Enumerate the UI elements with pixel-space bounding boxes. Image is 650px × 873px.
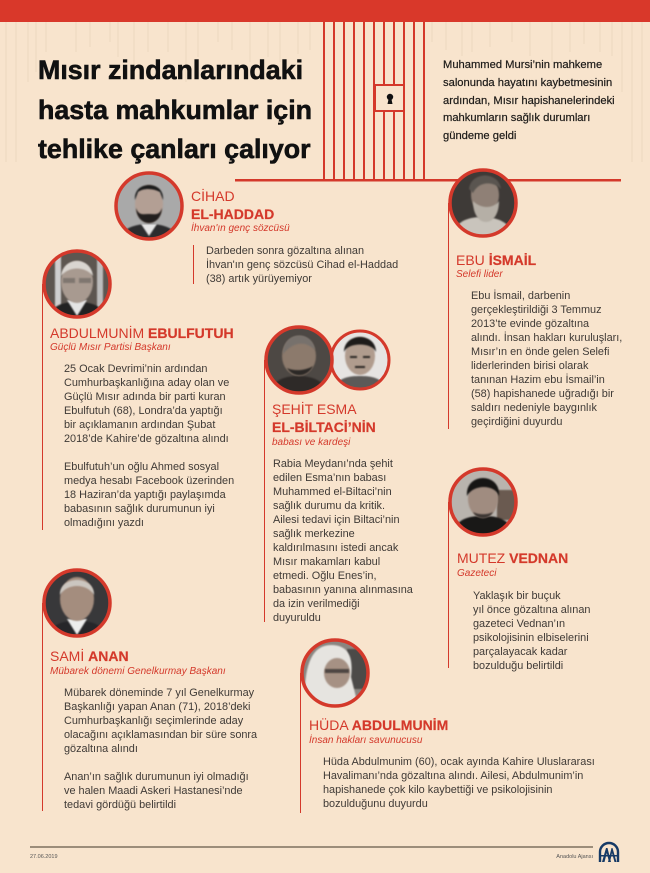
description: bozulduğu belirtildi <box>473 660 563 672</box>
description: gözaltına alındı <box>64 743 138 755</box>
title: tehlike çanları çalıyor <box>38 134 311 164</box>
panel: Ebu İsmail <box>448 168 622 429</box>
role: İhvan'ın genç sözcüsü <box>191 223 290 234</box>
source: Anadolu Ajansı <box>556 854 593 860</box>
description: Yaklaşık bir buçuk <box>473 590 561 602</box>
role: Güçlü Mısır Partisi Başkanı <box>50 342 171 353</box>
name <box>272 401 376 435</box>
description <box>64 687 258 811</box>
description <box>206 245 398 285</box>
panel: Cihad el-Haddad <box>114 171 398 285</box>
description: Muhammed el-Biltaci’nin <box>273 486 392 498</box>
date: 27.06.2019 <box>30 854 58 860</box>
role: Selefi lider <box>456 269 503 280</box>
description: Başkanlığı yapan Anan (71), 2018’deki <box>64 701 250 713</box>
description: parçalayacak kadar <box>473 646 567 658</box>
accent line <box>448 203 449 429</box>
footer rule <box>30 846 593 848</box>
accent line <box>193 245 194 284</box>
description <box>323 756 595 810</box>
description: Cumhurbaşkanlığına aday olan ve <box>64 377 229 389</box>
description: edilen Esma’nın babası <box>273 472 386 484</box>
description: Mısır makamları kabul <box>273 556 380 568</box>
description: medya hesabı Facebook üzerinden <box>64 475 234 487</box>
description: Güçlü Mısır adında bir parti kuran <box>64 391 226 403</box>
description: ve halen Maadi Askeri Hastanesi’nde <box>64 785 243 797</box>
description: geçirdiğini duyurdu <box>471 416 562 428</box>
description: sağlık durumu da kritik. <box>273 500 385 512</box>
description: etmedi. Oğlu Enes’in, <box>273 570 377 582</box>
panel: Abdulmunim Ebulfutuh <box>42 249 234 530</box>
description: Havalimanı’nda gözaltına alındı. Ailesi, Abdulmunim’in <box>323 770 583 782</box>
panel: Şehit Esma el-Biltaci'nin babası ve kardeşi <box>264 325 413 624</box>
name: CİHAD <box>191 188 235 204</box>
intro text: mahkumların sağlık durumları <box>443 112 590 124</box>
description: duyuruldu <box>273 612 321 624</box>
description: sağlık merkezine <box>273 528 355 540</box>
description <box>473 590 590 672</box>
intro text: ardından, Mısır hapishanelerindeki <box>443 95 615 107</box>
description: 18 Haziran’da yaptığı paylaşımda <box>64 489 226 501</box>
photo: Sami Anan <box>42 568 112 638</box>
accent line <box>42 284 43 530</box>
intro text: Muhammed Mursi’nin mahkeme <box>443 59 602 71</box>
description: 2013’te evinde gözaltına <box>471 318 589 330</box>
name: HÜDA ABDULMUNİM <box>309 717 448 733</box>
description: psikolojisinin elbiselerini <box>473 632 589 644</box>
role: Gazeteci <box>457 568 496 579</box>
description: Ebu İsmail, darbenin <box>471 290 570 302</box>
description: kaldırılmasını istedi ancak <box>273 542 398 554</box>
description: 2018’de Kahire’de gözaltına alındı <box>64 433 229 445</box>
photo: Ebu İsmail <box>448 168 518 238</box>
photo: brother <box>332 330 390 390</box>
photo: Mutez Vednan <box>448 467 518 537</box>
description: Ebulfutuh (68), Londra’da yaptığı <box>64 405 223 417</box>
accent line <box>300 673 301 813</box>
description: Rabia Meydanı’nda şehit <box>273 458 393 470</box>
intro text <box>443 59 615 142</box>
intro text: salonunda hayatını kaybetmesinin <box>443 77 612 89</box>
name: ŞEHİT ESMA <box>272 401 357 417</box>
description: babasının yanına alınmasına <box>273 584 413 596</box>
description: Hüda Abdulmunim (60), ocak ayında Kahire Uluslararası <box>323 756 595 768</box>
description: İhvan'ın genç sözcüsü Cihad el-Haddad <box>206 259 398 271</box>
role: babası ve kardeşi <box>272 437 350 448</box>
role: Mübarek dönemi Genelkurmay Başkanı <box>50 666 226 677</box>
description: hapishanede çok kilo kaybettiği ve psikolojisinin <box>323 784 552 796</box>
intro text: gündeme geldi <box>443 130 516 142</box>
description: gerçekleştirildiği 3 Temmuz <box>471 304 602 316</box>
name <box>191 188 274 222</box>
description: babasının sağlık durumunun iyi <box>64 503 215 515</box>
description: alındı. İnsan hakları kuruluşları, <box>471 332 622 344</box>
description: bozulduğunu duyurdu <box>323 798 428 810</box>
description: olmadığını yazdı <box>64 517 144 529</box>
panel: Sami Anan <box>42 568 258 811</box>
panel: Mutez Vednan <box>448 467 590 672</box>
accent line <box>264 360 265 622</box>
description: saldırı nedeniyle baygınlık <box>471 402 597 414</box>
title <box>38 55 312 164</box>
description: bir açıklamanın ardından Şubat <box>64 419 215 431</box>
description: (38) artık yürüyemiyor <box>206 273 312 285</box>
accent line <box>42 603 43 811</box>
description: gazeteci Vednan’ın <box>473 618 565 630</box>
accent line <box>448 502 449 668</box>
name: ABDULMUNİM EBULFUTUH <box>50 325 234 341</box>
description: Ailesi tedavi için Biltaci’nin <box>273 514 400 526</box>
description <box>64 363 234 529</box>
name: EBU İSMAİL <box>456 252 536 268</box>
name: SAMİ ANAN <box>50 648 129 664</box>
title: hasta mahkumlar için <box>38 94 312 124</box>
name: MUTEZ VEDNAN <box>457 550 568 566</box>
title: Mısır zindanlarındaki <box>38 55 303 85</box>
description: 25 Ocak Devrimi’nin ardından <box>64 363 207 375</box>
photo: Hüda Abdulmunim <box>300 638 370 708</box>
role: İnsan hakları savunucusu <box>309 735 422 746</box>
description <box>471 290 622 428</box>
description: tanınan Hazim ebu İsmail’in <box>471 374 605 386</box>
description: yıl önce gözaltına alınan <box>473 604 590 616</box>
description: da izin verilmediği <box>273 598 360 610</box>
description: tedavi gördüğü belirtildi <box>64 799 176 811</box>
photo: father <box>264 325 334 395</box>
name: EL-HADDAD <box>191 206 274 222</box>
photo: Abdulmunim Ebulfutuh <box>42 249 112 319</box>
description: Ebulfutuh’un oğlu Ahmed sosyal <box>64 461 219 473</box>
name: EL-BİLTACİ’NİN <box>272 419 376 435</box>
description: Darbeden sonra gözaltına alınan <box>206 245 364 257</box>
description <box>273 458 413 624</box>
description: olacağını açıklamasından bir süre sonra <box>64 729 257 741</box>
prison bars illustration <box>235 22 621 182</box>
photo: Cihad el-Haddad <box>114 171 184 241</box>
description: Cumhurbaşkanlığı seçimlerinde aday <box>64 715 243 727</box>
panel: Hüda Abdulmunim <box>300 638 595 813</box>
description: Anan’ın sağlık durumunun iyi olmadığı <box>64 771 249 783</box>
top red band <box>0 0 650 22</box>
icon: Anadolu Agency logo <box>598 842 620 862</box>
description: Mısır’ın en önde gelen Selefi <box>471 346 609 358</box>
description: (58) hapishanede uğradığı bir <box>471 388 614 400</box>
background faint bars <box>0 22 650 172</box>
description: liderlerinden birisi olarak <box>471 360 588 372</box>
description: Mübarek döneminde 7 yıl Genelkurmay <box>64 687 254 699</box>
